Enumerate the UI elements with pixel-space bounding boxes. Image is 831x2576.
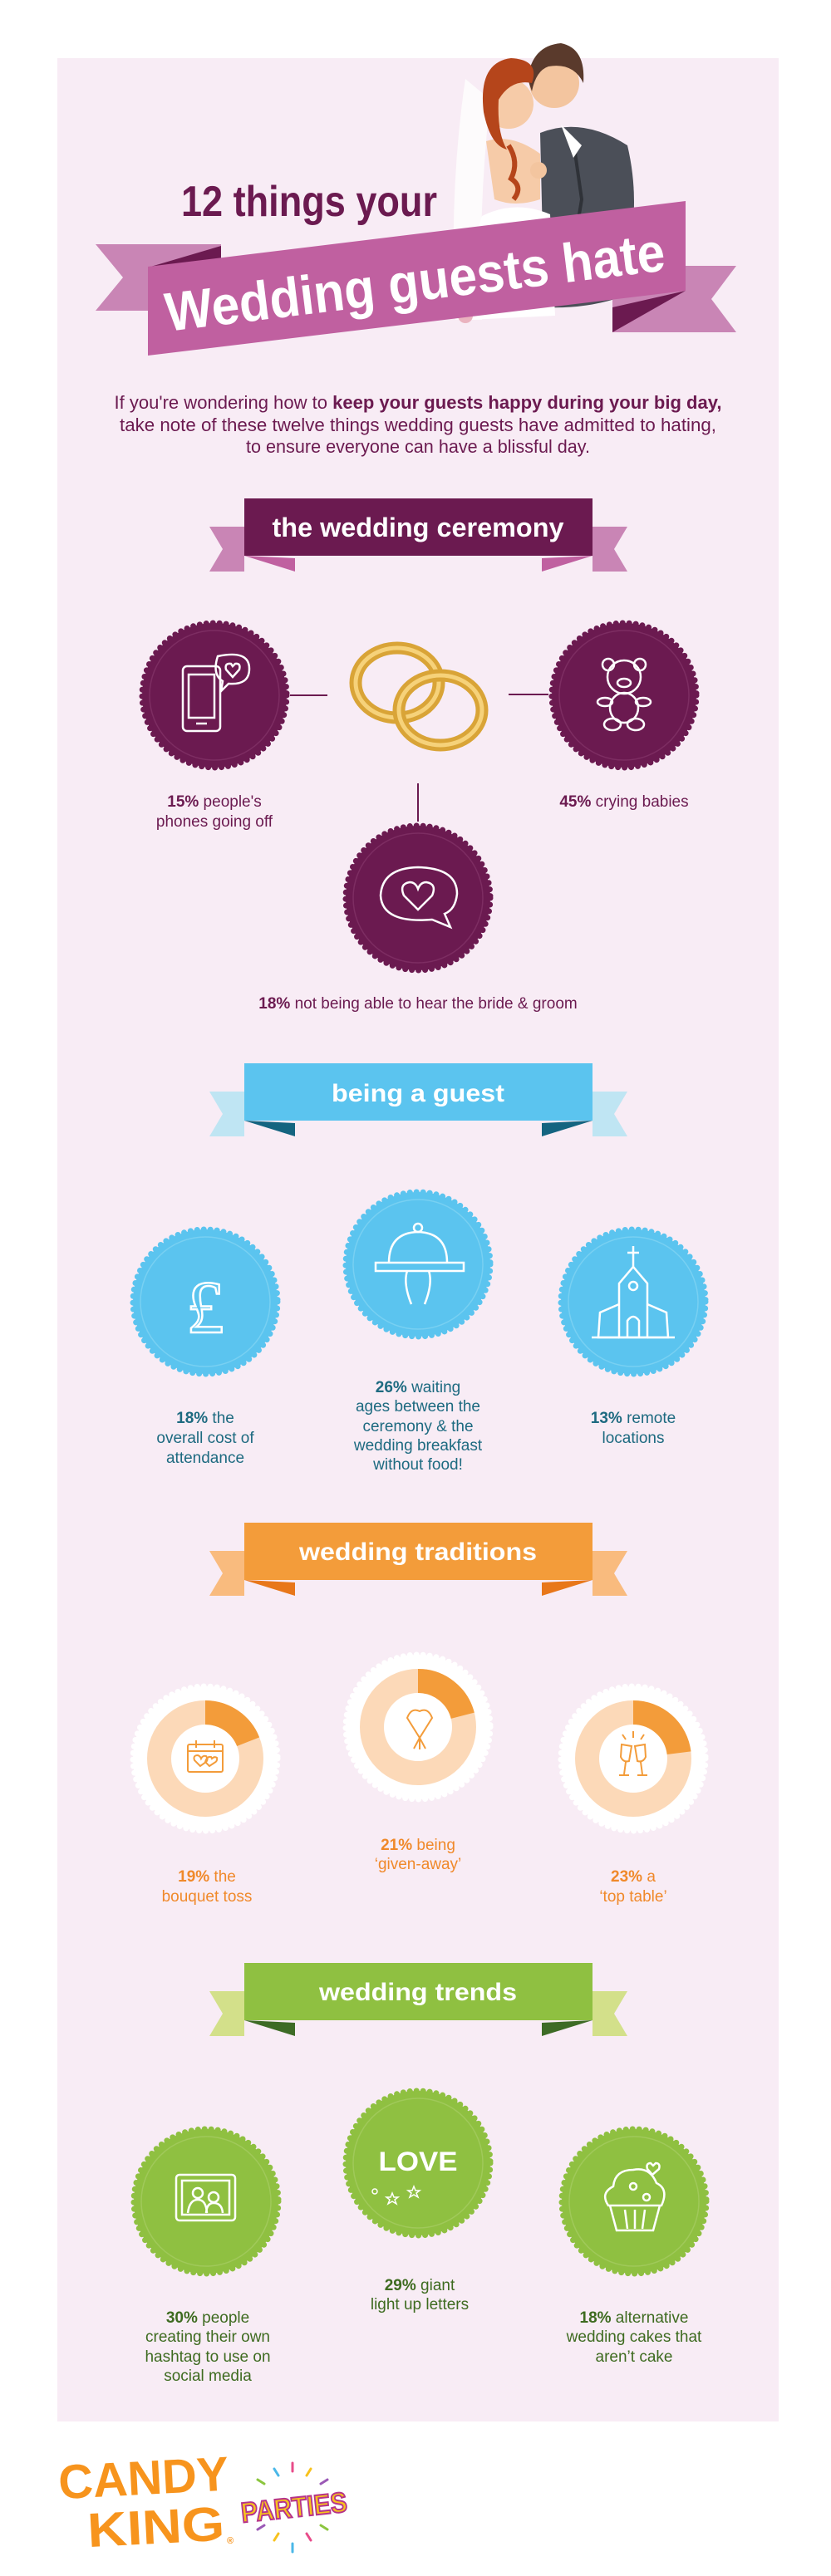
stat: phones: 15% people's xyxy=(167,793,262,811)
stat: cakes: aren’t cake xyxy=(596,2348,672,2366)
stat: love letters xyxy=(371,2277,469,2313)
badge: remote locations xyxy=(561,1229,706,1374)
badge: cost xyxy=(133,1229,278,1374)
header: being a guest: being a guest xyxy=(332,1080,504,1107)
intro text xyxy=(115,392,721,457)
stat: cakes xyxy=(566,2309,702,2366)
stat: given away xyxy=(375,1837,461,1873)
donut: top table xyxy=(561,1686,706,1831)
stat: hashtag: social media xyxy=(164,2367,252,2385)
badge: love letters: LOVE xyxy=(379,2147,457,2176)
stat: top table: ‘top table’ xyxy=(599,1888,667,1906)
stat: remote locations: 13% remote xyxy=(591,1410,676,1427)
badge: phones xyxy=(142,623,287,768)
logo: Parties xyxy=(239,2463,349,2552)
header: the wedding ceremony: the wedding ceremony xyxy=(273,513,564,542)
stat: phones: phones going off xyxy=(156,813,273,831)
logo: Candy King: KING xyxy=(86,2497,226,2558)
stat: hashtag: hashtag to use on xyxy=(145,2348,271,2366)
title line 2: Wedding guests hate xyxy=(161,221,668,343)
stat: hashtag: 30% people xyxy=(166,2309,249,2327)
header: wedding trends xyxy=(209,1963,627,2036)
icon: wedding rings xyxy=(356,648,482,745)
stat: waiting for food: 26% waiting xyxy=(376,1379,460,1396)
stat: phones xyxy=(156,793,273,831)
logo: Candy King: CANDY xyxy=(57,2447,230,2510)
stat: waiting for food xyxy=(353,1379,483,1474)
stat: love letters: 29% giant xyxy=(385,2277,455,2294)
stat: cakes: 18% alternative xyxy=(580,2309,688,2327)
donut: given away xyxy=(346,1655,490,1799)
stat: cost: overall cost of xyxy=(156,1430,254,1447)
header: being a guest xyxy=(209,1063,627,1136)
stat: cost: attendance xyxy=(166,1450,244,1467)
stat: waiting for food: ages between the xyxy=(356,1398,480,1416)
donut: bouquet toss xyxy=(133,1686,278,1831)
background panel xyxy=(57,58,779,2421)
stat: crying babies: 45% crying babies xyxy=(559,793,689,811)
title line 1: 12 things your xyxy=(181,178,437,226)
stat: hashtag: creating their own xyxy=(145,2328,270,2346)
stat: bouquet toss: 19% the xyxy=(178,1868,236,1886)
intro text: take note of these twelve things wedding guests have admitted to hating, xyxy=(120,415,716,435)
badge: cost: £ xyxy=(186,1267,224,1349)
stat: remote locations: locations xyxy=(602,1430,665,1447)
stat: waiting for food: wedding breakfast xyxy=(353,1437,483,1455)
connector lines xyxy=(290,694,548,822)
stat: remote locations xyxy=(591,1410,676,1447)
header: the wedding ceremony xyxy=(209,498,627,572)
stat: love letters: light up letters xyxy=(371,2296,469,2313)
stat: top table xyxy=(599,1868,667,1906)
stat: bouquet toss xyxy=(162,1868,252,1906)
stat: waiting for food: without food! xyxy=(372,1456,463,1474)
logo: Candy King xyxy=(57,2447,234,2558)
header: wedding traditions xyxy=(209,1523,627,1596)
badge: waiting for food xyxy=(346,1192,490,1337)
title banner xyxy=(96,201,736,356)
illustration: bride and groom xyxy=(454,43,634,323)
intro text: If you're wondering how to keep your guests happy during your big day, xyxy=(115,392,721,413)
badge: hearing xyxy=(346,826,490,970)
header: wedding trends: wedding trends xyxy=(318,1979,517,2006)
stat: bouquet toss: bouquet toss xyxy=(162,1888,252,1906)
logo: Parties: PARTIES xyxy=(239,2486,349,2529)
stat: given away: ‘given-away’ xyxy=(375,1856,461,1873)
stat: cost: 18% the xyxy=(176,1410,234,1427)
intro text: to ensure everyone can have a blissful day. xyxy=(246,436,590,457)
badge: love letters xyxy=(346,2091,490,2235)
header: wedding traditions: wedding traditions xyxy=(298,1538,537,1566)
stat: cakes: wedding cakes that xyxy=(566,2328,702,2346)
stat: given away: 21% being xyxy=(381,1837,455,1854)
badge: hashtag xyxy=(134,2129,278,2274)
stat: hashtag xyxy=(145,2309,271,2385)
stat: waiting for food: ceremony & the xyxy=(362,1418,474,1435)
stat: top table: 23% a xyxy=(611,1868,656,1886)
stat: hearing: 18% not being able to hear the bride & groom xyxy=(258,995,578,1013)
badge: crying babies xyxy=(552,623,696,768)
badge: cakes xyxy=(562,2129,706,2274)
stat: cost xyxy=(156,1410,254,1467)
logo: Candy King: ® xyxy=(227,2536,234,2546)
